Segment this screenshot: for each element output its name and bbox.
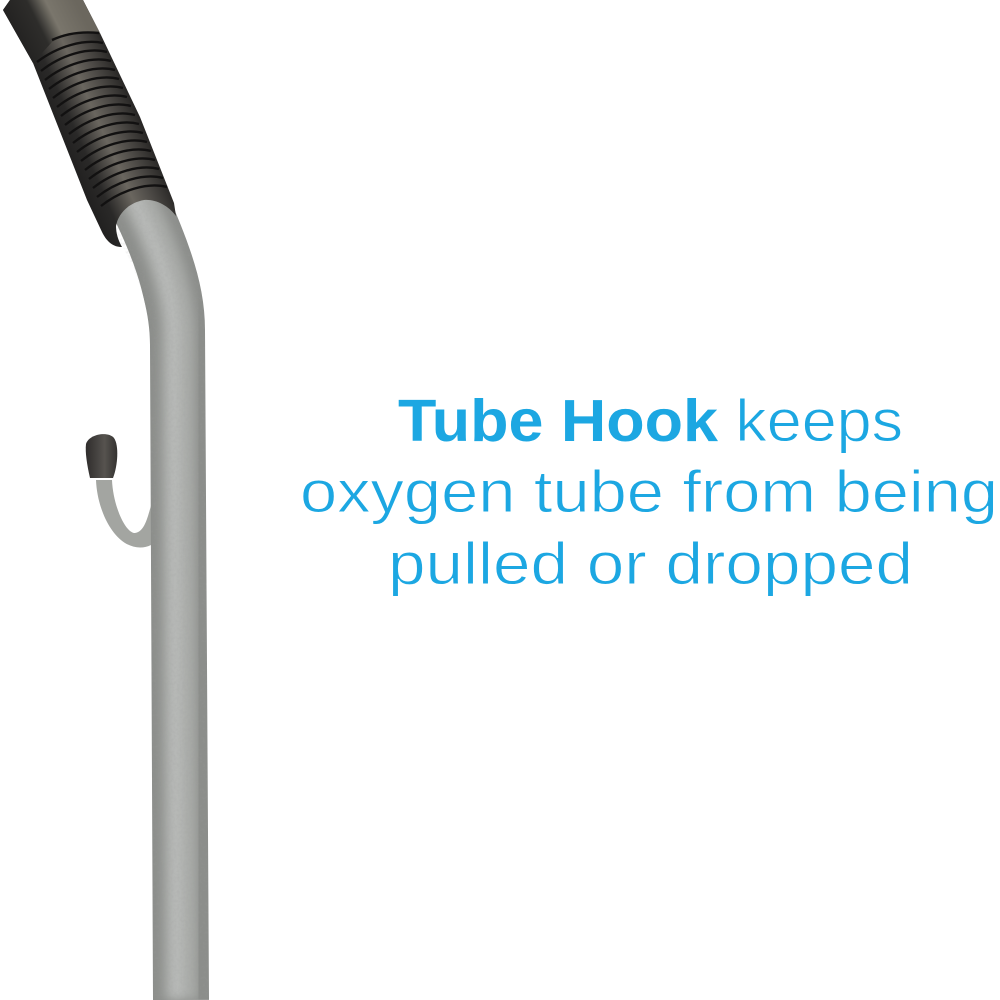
grip smooth upper section	[3, 0, 100, 63]
caption	[300, 388, 998, 597]
pole texture	[116, 228, 142, 290]
foam grip	[3, 0, 176, 247]
caption line 2: oxygen tube from being	[300, 459, 998, 525]
illustration: walker pole with tube hook	[3, 0, 220, 1000]
pole base colour	[128, 180, 181, 1000]
grip body	[3, 0, 176, 247]
pole highlight	[124, 180, 181, 1000]
metal pole	[116, 200, 209, 1000]
tube hook arm	[96, 480, 151, 547]
grip ribs	[37, 32, 167, 206]
caption line 1: Tube Hook keeps	[398, 388, 903, 454]
caption line 3: pulled or dropped	[388, 531, 913, 597]
hook rubber tip	[86, 434, 117, 478]
